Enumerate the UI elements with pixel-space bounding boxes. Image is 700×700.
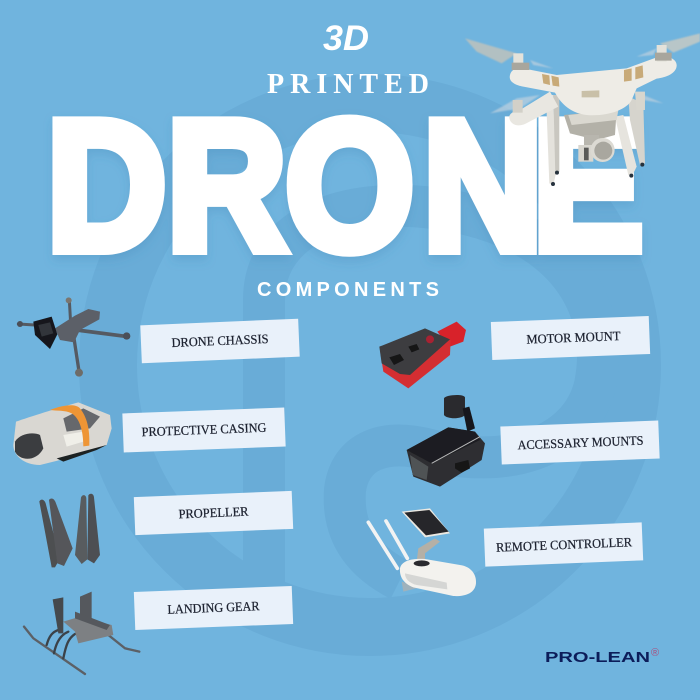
label: accessary mounts	[500, 420, 660, 465]
image: folded drone with orange strap	[13, 402, 112, 465]
image: drone chassis frame	[17, 297, 130, 377]
label: remote controller: REMOTE CONTROLLER	[496, 534, 633, 555]
image: motor mount	[379, 322, 466, 388]
label: drone chassis: DRONE CHASSIS	[171, 331, 269, 350]
component: drone chassis	[17, 297, 300, 377]
component: motor mount	[379, 316, 650, 388]
label: drone chassis	[140, 319, 300, 363]
label: motor mount: MOTOR MOUNT	[526, 328, 621, 347]
label: motor mount	[491, 316, 650, 360]
component: landing gear	[24, 586, 293, 674]
label: protective casing: PROTECTIVE CASING	[141, 420, 267, 439]
heading: PRINTED: PRINTED	[267, 69, 429, 100]
label: propeller: PROPELLER	[178, 504, 249, 521]
image: landing gear	[24, 592, 139, 674]
component: remote controller	[368, 508, 643, 596]
logo: PRO-LEAN: PRO-LEAN	[545, 650, 650, 666]
label: propeller	[134, 491, 293, 535]
logo: PRO-LEAN: ®	[651, 647, 659, 659]
label: remote controller	[484, 522, 643, 567]
image: camera accessory mount	[407, 395, 485, 487]
label: protective casing	[122, 408, 286, 452]
heading: DRONE: DRONE	[47, 84, 643, 289]
label: landing gear	[134, 586, 293, 630]
component: accessary mounts	[407, 395, 660, 487]
label: landing gear: LANDING GEAR	[167, 598, 260, 617]
component: propeller	[39, 491, 293, 567]
heading: COMPONENTS: COMPONENTS	[257, 279, 439, 301]
image: remote controller	[368, 508, 476, 596]
component: protective casing	[13, 402, 286, 465]
image: folded propellers	[39, 494, 100, 567]
label: accessary mounts: ACCESSARY MOUNTS	[517, 433, 644, 452]
logo: PRO-LEAN	[545, 647, 659, 666]
image: quadcopter drone	[465, 33, 700, 186]
watermark logo	[108, 103, 632, 627]
heading: 3D: 3D	[323, 19, 369, 58]
